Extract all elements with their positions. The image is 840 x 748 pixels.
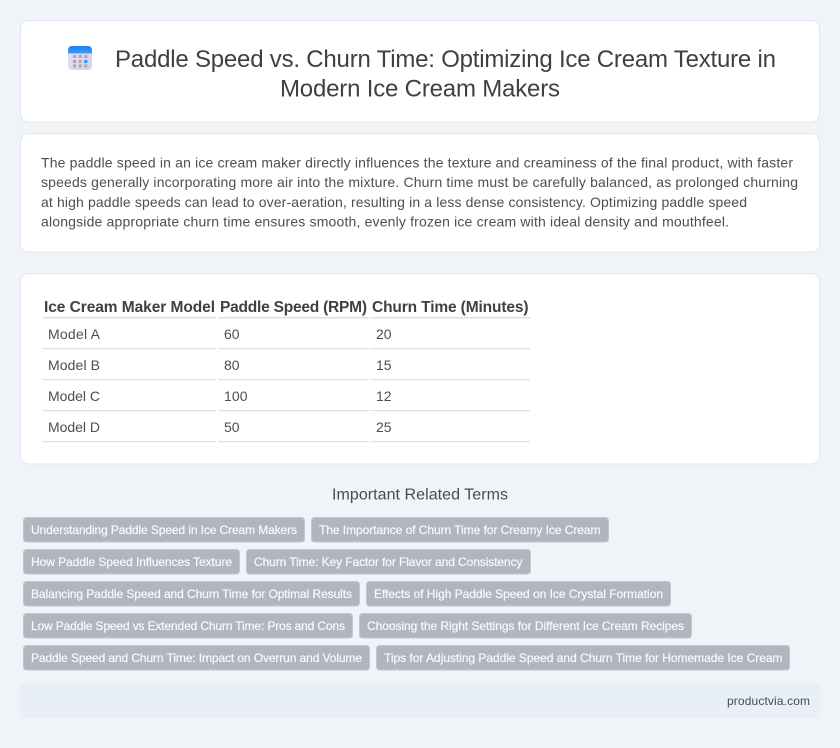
tag: The Importance of Churn Time for Creamy Ice Cream [319,523,600,537]
tag [24,550,240,574]
footer [20,684,820,718]
text block: introduction paragraph: The paddle speed in an ice cream maker directly influences the texture and creaminess of the final product, with faster [41,154,793,170]
panel: related term tags [24,518,790,670]
title [115,46,776,102]
panel: comparison table [20,274,820,464]
tag [24,518,304,542]
table header: Paddle Speed (RPM) [220,299,367,316]
tag [246,550,530,574]
table row: Model C: 12 [376,388,392,404]
title: Paddle Speed vs. Churn Time: Optimizing Ice Cream Texture in [115,46,776,73]
table row: Model A: 60 [224,326,240,342]
table row: Model C: Model C [48,388,100,404]
tag [24,646,370,670]
table row: Model C: 100 [224,388,248,404]
table row: Model B: 80 [224,357,240,373]
tag: How Paddle Speed Influences Texture [31,555,232,569]
table row: Model D [43,419,530,442]
table row: Model C [43,388,530,411]
table header [43,299,530,318]
text block: introduction paragraph [41,154,798,230]
table row: Model D: 50 [224,419,240,435]
table row: Model A: Model A [48,326,101,342]
tag [366,582,670,606]
tag [376,646,790,670]
tag [312,518,608,542]
footer: productvia.com [727,694,810,708]
panel: header [20,20,820,122]
tag [24,614,352,638]
tag: Paddle Speed and Churn Time: Impact on Overrun and Volume [31,651,362,665]
tag: Effects of High Paddle Speed on Ice Crystal Formation [374,587,663,601]
icon: calendar [68,46,92,70]
tag: Churn Time: Key Factor for Flavor and Consistency [254,555,522,569]
tag [24,582,360,606]
table row: Model A [43,326,530,349]
heading: important related terms: Important Related Terms [332,486,508,504]
table row: Model D: 25 [376,419,392,435]
table row: Model D: Model D [48,419,100,435]
tag: Understanding Paddle Speed in Ice Cream Makers [31,523,297,537]
table row: Model B [43,357,530,380]
panel: introduction [20,134,820,252]
text block: introduction paragraph: speeds generally incorporating more air into the mixture. Churn time must be carefully balanced, as prolonged churning [41,174,798,190]
text block: introduction paragraph: at high paddle speeds can lead to over-aeration, resulting in a less dense consistency. Optimizing paddle speed [41,194,747,210]
tag: Low Paddle Speed vs Extended Churn Time: Pros and Cons [31,619,345,633]
table row: Model B: 15 [376,357,392,373]
table header: Churn Time (Minutes) [372,299,528,316]
tag: Tips for Adjusting Paddle Speed and Churn Time for Homemade Ice Cream [384,651,782,665]
tag [360,614,692,638]
title: Modern Ice Cream Makers [280,76,560,102]
tag: Choosing the Right Settings for Different Ice Cream Recipes [367,619,684,633]
text block: introduction paragraph: alongside appropriate churn time ensures smooth, evenly frozen ice cream with ideal density and mouthfeel. [41,214,729,230]
table header: Ice Cream Maker Model [44,299,215,316]
table row: Model A: 20 [376,326,392,342]
table row: Model B: Model B [48,357,100,373]
tag: Balancing Paddle Speed and Churn Time for Optimal Results [31,587,352,601]
